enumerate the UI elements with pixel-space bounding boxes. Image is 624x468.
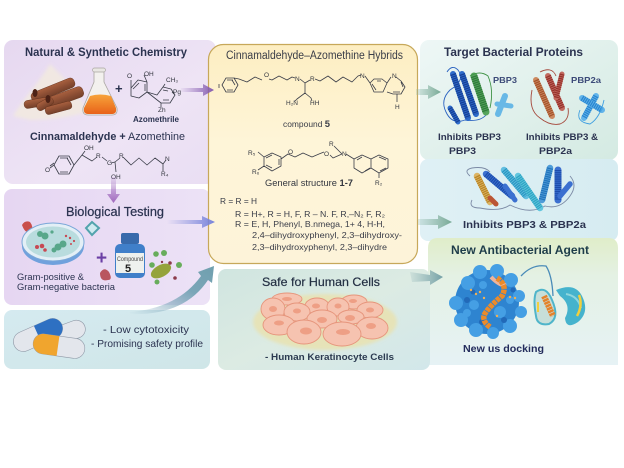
plus sign: + [115, 81, 123, 96]
arrow: hybrids to target proteins [416, 85, 441, 99]
label: bacteria types: Gram-negative bacteria [17, 282, 115, 292]
arrow: safety profile to hybrids [130, 266, 214, 314]
molecule: general structure: O [324, 151, 329, 158]
panel: new antibacterial agent [428, 238, 618, 365]
molecule: general structure: O [288, 149, 293, 156]
molecule: azomethrile: O [127, 73, 132, 80]
panel: safe for human cells [218, 269, 430, 370]
caption: inhibits PBP3 and PBP2a: PBP2a [539, 146, 573, 157]
arrow: safe cells to new agent [410, 270, 443, 285]
label: cinnamaldehyde plus azomethine: Cinnamaldehyde + Azomethine [30, 131, 185, 143]
molecule: compound 5: H [395, 104, 400, 111]
caption: inhibits PBP3 [438, 132, 501, 157]
label: bacteria types: Gram-positive & [17, 272, 84, 282]
molecule: general structure [248, 141, 388, 187]
icon: cinnamon sticks on powder [13, 64, 87, 120]
molecule: compound 5: HH [310, 100, 320, 107]
arrow: chemistry to biological testing [107, 177, 120, 203]
icon: diamond marker [86, 222, 99, 235]
label: compound 5: compound 5 [283, 119, 331, 130]
molecule: compound 5 [219, 72, 405, 111]
molecule: compound 5: N [360, 73, 365, 80]
heading: hybrids: Cinnamaldehyde–Azomethine Hybrids [226, 50, 403, 62]
panel: cinnamaldehyde azomethine hybrids [208, 44, 418, 264]
caption: inhibits PBP3 and PBP2a: Inhibits PBP3 & [526, 132, 598, 143]
icon: protein surface with ligand [449, 264, 527, 339]
heading: natural and synthetic chemistry: Natural & Synthetic Chemistry [25, 47, 188, 59]
molecule: azomethrile: CH₃ [166, 77, 178, 84]
icon: PBP3 protein [444, 67, 511, 122]
icon: red bacterium [100, 269, 111, 280]
molecule: combined chain: R [96, 153, 101, 160]
icon: compound 5 bottle [115, 233, 145, 278]
label: compound 5 [117, 257, 143, 275]
text: low cytotoxicity: - Low cytotoxicity [103, 324, 190, 336]
text: substituent list: 2,4–dihydroxyphenyl, 2,3–dihydroxy- [252, 230, 402, 240]
molecule: compound 5: H₂N [286, 100, 298, 107]
icon: protein complex [467, 168, 574, 210]
molecule: compound 5: O [264, 72, 269, 79]
text: substituent list: R = E, H, Phenyl, B.nmega, 1+ 4, H-H, [235, 219, 385, 229]
molecule: general structure: N [342, 151, 347, 158]
arrow: biological testing to hybrids [167, 216, 215, 228]
molecule: general structure: R₅ [248, 150, 256, 157]
caption: inhibits PBP3: Inhibits PBP3 [438, 132, 501, 143]
molecule: compound 5: R [310, 76, 315, 83]
panel: target bacterial proteins [420, 40, 618, 160]
icon: flask with orange liquid [83, 68, 117, 115]
label: PBP2a: PBP2a [571, 75, 601, 85]
molecule: general structure: R₆ [252, 169, 260, 176]
molecule: general structure: R [329, 141, 334, 148]
heading: biological testing: Biological Testing [66, 205, 164, 219]
caption: inhibits PBP3 and PBP2a [526, 132, 598, 157]
icon: bacteria cluster [148, 250, 182, 284]
label: azomethrile: Azomethrile [133, 115, 179, 124]
label: PBP3: PBP3 [493, 75, 517, 85]
panel: natural and synthetic chemistry [4, 40, 216, 184]
icon: PBP2a protein [531, 70, 604, 124]
illustration: keratinocyte cells [253, 293, 397, 350]
icon: capsules [10, 315, 88, 360]
arrow: chemistry to hybrids [181, 84, 214, 96]
text: substituent list: R = R = H [220, 196, 257, 206]
molecule: compound 5: N [392, 73, 397, 80]
molecule: combined chain: G [107, 160, 112, 167]
text: substituent list: 2,3–dihydroxyphenyl, 2,3–dihydre [252, 242, 387, 252]
molecule: azomethrile [127, 71, 181, 114]
panel: inhibits both proteins [420, 159, 618, 241]
molecule: azomethrile: Zh [158, 107, 166, 114]
caption: inhibits PBP3: PBP3 [449, 146, 476, 157]
arrow: hybrids to protein complex [418, 215, 452, 229]
heading: safe for human cells: Safe for Human Cells [262, 275, 380, 289]
panel: biological testing [4, 189, 210, 305]
molecule: compound 5: N [295, 76, 300, 83]
molecule: combined chain: O [45, 167, 50, 174]
molecule: azomethrile: Pg [173, 89, 181, 96]
icon: docking pocket [521, 266, 585, 325]
label: general structure: General structure 1-7 [265, 178, 353, 188]
molecule: combined chain: N [165, 156, 170, 163]
molecule: combined chain: OH [84, 145, 94, 152]
label: compound 5: Compound [117, 257, 143, 263]
molecule: combined chain: R [119, 153, 124, 160]
label: bacteria types [17, 272, 115, 292]
heading: target bacterial proteins: Target Bacterial Proteins [444, 47, 583, 59]
panel: safety profile capsules [4, 310, 210, 369]
label: compound 5: 5 [125, 263, 131, 275]
molecule: combined chain: R₄ [161, 171, 169, 178]
molecule: azomethrile: OH [144, 71, 154, 78]
heading: new antibacterial agent: New Antibacterial Agent [451, 243, 589, 257]
text: substituent list: R = H+, R = H, F, R – N. F, R,–N₂ F, R₂ [235, 209, 385, 219]
molecule: combined chain: OH [111, 174, 121, 181]
caption: new us docking: New us docking [463, 344, 544, 355]
plus sign: + [96, 248, 107, 269]
icon: petri dish [22, 221, 84, 265]
text: promising safety profile: - Promising safety profile [91, 338, 203, 350]
molecule: general structure: R₂ [375, 180, 383, 187]
text: substituent list [220, 196, 402, 252]
caption: human keratinocyte cells: - Human Keratinocyte Cells [265, 352, 394, 363]
caption: inhibits PBP3 and PBP2a: Inhibits PBP3 & PBP2a [463, 219, 586, 231]
molecule: combined chain [45, 145, 170, 181]
